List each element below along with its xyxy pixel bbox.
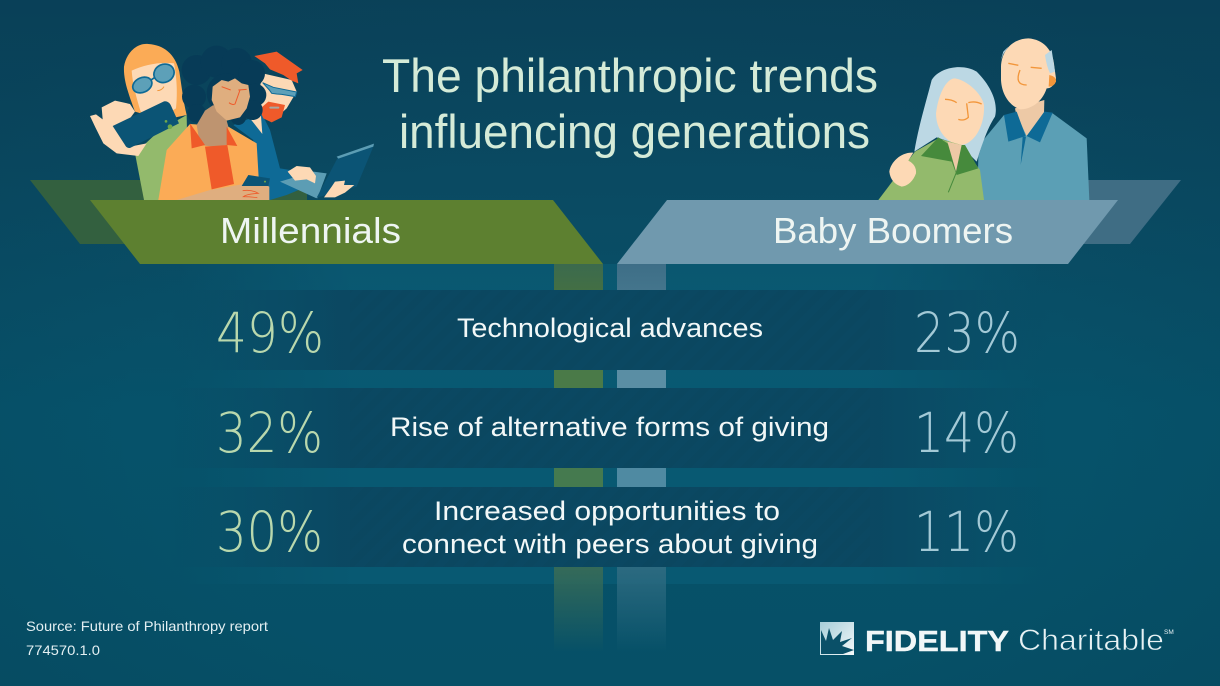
logo: Fidelity Charitable bbox=[820, 622, 1174, 658]
back ribbon: baby boomers bbox=[1060, 180, 1181, 244]
illustration: baby boomers couple bbox=[878, 38, 1089, 200]
icon: starburst bbox=[820, 622, 854, 655]
row: alternative forms of giving bbox=[170, 388, 1050, 468]
title bbox=[382, 49, 878, 158]
label: peers about giving bbox=[402, 496, 818, 559]
woman with curly hair bbox=[158, 46, 270, 200]
value: boomers 11%: 11% bbox=[914, 500, 1019, 564]
ribbon: Baby Boomers bbox=[617, 200, 1118, 264]
value: millennials 30%: 30% bbox=[216, 500, 323, 564]
man with laptop bbox=[233, 52, 374, 200]
source note: 774570.1.0 bbox=[26, 642, 100, 658]
value: boomers 14%: 14% bbox=[914, 401, 1019, 465]
woman with phone bbox=[90, 44, 188, 200]
label: peers about giving: Increased opportunities to bbox=[434, 496, 780, 526]
logo: Fidelity Charitable: FIDELITY bbox=[865, 626, 1009, 658]
title: The philanthropic trends bbox=[382, 49, 878, 102]
heading: Baby Boomers: Baby Boomers bbox=[773, 210, 1013, 251]
heading: Millennials: Millennials bbox=[220, 210, 401, 251]
illustration: millennials group bbox=[90, 44, 374, 200]
ribbon: Millennials bbox=[90, 200, 603, 264]
row: peers about giving bbox=[170, 487, 1050, 567]
center column: baby boomers bbox=[617, 264, 666, 652]
source note bbox=[26, 618, 268, 658]
value: millennials 32%: 32% bbox=[216, 401, 323, 465]
back ribbon: millennials bbox=[30, 180, 307, 244]
man bbox=[977, 38, 1089, 200]
logo: Fidelity Charitable: SM bbox=[1164, 629, 1174, 636]
value: boomers 23%: 23% bbox=[914, 301, 1020, 365]
logo: Fidelity Charitable: Charitable bbox=[1018, 624, 1164, 657]
center column: millennials bbox=[554, 264, 603, 652]
label: technological advances: Technological advances bbox=[457, 313, 763, 343]
value: millennials 49%: 49% bbox=[216, 301, 324, 365]
label: peers about giving: connect with peers about giving bbox=[402, 529, 818, 559]
woman bbox=[878, 67, 996, 200]
row: technological advances bbox=[170, 290, 1050, 370]
source note: Source: Future of Philanthropy report bbox=[26, 618, 268, 634]
title: influencing generations bbox=[399, 105, 870, 158]
label: alternative forms of giving: Rise of alternative forms of giving bbox=[390, 412, 829, 442]
curly hair bbox=[182, 46, 266, 125]
